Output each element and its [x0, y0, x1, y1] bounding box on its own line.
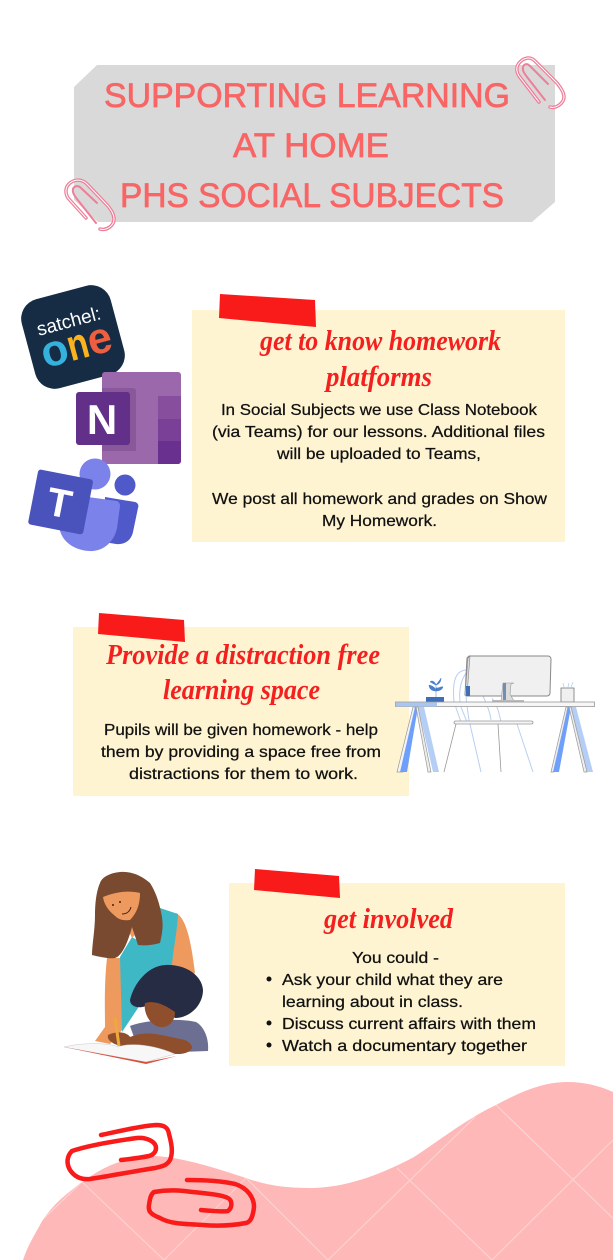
icon: teams: T — [43, 480, 75, 528]
heading: get involved — [323, 904, 454, 935]
heading — [259, 326, 501, 393]
body list — [266, 950, 536, 1055]
child hair — [130, 965, 203, 1018]
body list: You could - — [352, 950, 439, 967]
body text: My Homework. — [322, 513, 437, 530]
body list: Ask your child what they are — [282, 972, 503, 989]
tape — [219, 294, 316, 327]
body text: distractions for them to work. — [129, 766, 358, 783]
icon: satchel one: n — [61, 318, 94, 371]
parent arms — [95, 913, 195, 1044]
body text: them by providing a space free from — [101, 744, 381, 761]
icon: pink paperclip bottom left — [66, 180, 114, 229]
heading: platforms — [324, 362, 432, 393]
parent neck — [122, 905, 145, 938]
title text — [104, 77, 510, 215]
body text — [101, 722, 381, 783]
title panel — [74, 65, 555, 222]
body text: will be uploaded to Teams, — [276, 446, 481, 463]
notebook — [64, 1044, 175, 1062]
title text: SUPPORTING LEARNING — [104, 77, 510, 115]
title text: AT HOME — [233, 127, 389, 165]
panel: get involved — [229, 869, 565, 1066]
icon: red paperclip upper — [68, 1125, 172, 1179]
pencil — [115, 1018, 119, 1046]
icon: teams — [28, 458, 138, 551]
child face — [145, 1002, 175, 1027]
icon: satchel one — [17, 281, 129, 393]
icon: onenote: N — [87, 396, 117, 443]
heading — [105, 640, 380, 706]
icon: satchel one: o — [35, 324, 74, 378]
parent top — [120, 908, 178, 1032]
body list: Watch a documentary together — [282, 1038, 528, 1055]
icon: onenote — [76, 372, 181, 464]
body text — [212, 402, 547, 530]
tape — [98, 613, 185, 642]
parent hair — [92, 872, 163, 958]
body text: In Social Subjects we use Class Notebook — [221, 402, 538, 419]
child shirt — [130, 1020, 208, 1052]
child arm — [108, 1032, 192, 1054]
decorative pink wave — [0, 1082, 613, 1260]
body list: learning about in class. — [282, 994, 463, 1011]
body list: Discuss current affairs with them — [282, 1016, 536, 1033]
heading: get to know homework — [259, 326, 501, 357]
body text: Pupils will be given homework - help — [104, 722, 378, 739]
body text: (via Teams) for our lessons. Additional files — [212, 424, 545, 441]
parent face — [103, 892, 140, 920]
title text: PHS SOCIAL SUBJECTS — [120, 177, 504, 215]
heading: learning space — [163, 675, 320, 706]
panel: homework platforms — [192, 294, 565, 542]
icon: satchel one: e — [81, 312, 117, 366]
body text: We post all homework and grades on Show — [212, 491, 547, 508]
illustration: parent helping child — [64, 872, 208, 1064]
panel: distraction free space — [73, 613, 409, 796]
icon: red paperclip lower — [149, 1180, 254, 1226]
heading: Provide a distraction free — [105, 640, 380, 671]
illustration: desk and monitor — [396, 656, 594, 772]
icon: satchel one: satchel: — [35, 303, 103, 341]
icon: pink paperclip top right — [517, 58, 564, 107]
tape — [254, 869, 340, 898]
